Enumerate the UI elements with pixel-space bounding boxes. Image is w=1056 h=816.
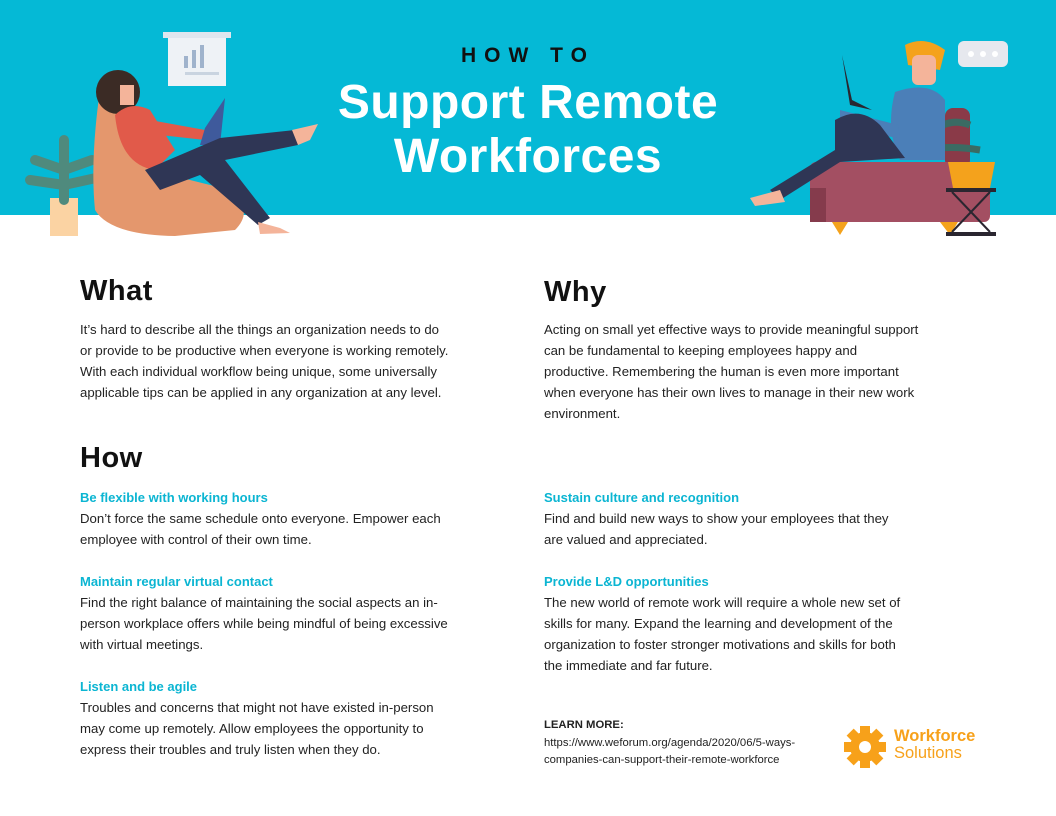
- tip: listen: [80, 679, 434, 757]
- heading: How: How: [80, 442, 143, 474]
- logo: Workforce: [894, 727, 975, 745]
- section: What: applicable tips can be applied in any organization at any level.: [80, 385, 441, 400]
- tip: culture: [544, 490, 889, 547]
- title: [338, 44, 718, 183]
- tip: L&D: the immediate and far future.: [544, 658, 713, 673]
- title: Support Remote: [338, 76, 718, 129]
- section: What: or provide to be productive when everyone is working remotely.: [80, 343, 448, 358]
- tip: culture: Find and build new ways to show your employees that they: [544, 511, 889, 526]
- learn more: LEARN MORE:: [544, 719, 624, 731]
- section: What: It’s hard to describe all the things an organization needs to do: [80, 322, 439, 337]
- tip: flexible hours: Don’t force the same schedule onto everyone. Empower each: [80, 511, 441, 526]
- learn more: https://www.weforum.org/agenda/2020/06/5-ways-: [544, 736, 795, 748]
- tip: flexible hours: [80, 490, 441, 547]
- illustration: woman on beanbag: [25, 32, 318, 236]
- logo: Solutions: [894, 744, 962, 762]
- learn more: companies-can-support-their-remote-workforce: [544, 754, 779, 766]
- tip: L&D: The new world of remote work will require a whole new set of: [544, 595, 900, 610]
- section: What: What: [80, 275, 153, 307]
- illustration: man on couch: [750, 41, 1008, 236]
- section: Why: environment.: [544, 406, 620, 421]
- tip: flexible hours: Be flexible with working hours: [80, 490, 268, 505]
- section: Why: [544, 276, 918, 421]
- tip: virtual contact: Find the right balance of maintaining the social aspects an in-: [80, 595, 438, 610]
- tip: listen: express their troubles and truly listen when they do.: [80, 742, 381, 757]
- tip: virtual contact: [80, 574, 448, 652]
- tip: L&D: organization to foster stronger motivations and skills for both: [544, 637, 896, 652]
- tip: virtual contact: Maintain regular virtual contact: [80, 574, 273, 589]
- tip: listen: may come up remotely. Allow employees the opportunity to: [80, 721, 424, 736]
- tip: culture: Sustain culture and recognition: [544, 490, 739, 505]
- tip: listen: Troubles and concerns that might not have existed in-person: [80, 700, 434, 715]
- title: Workforces: [394, 130, 662, 183]
- tip: L&D: Provide L&D opportunities: [544, 574, 709, 589]
- section: Why: Acting on small yet effective ways to provide meaningful support: [544, 322, 918, 337]
- section: Why: Why: [544, 276, 607, 308]
- section: Why: productive. Remembering the human is even more important: [544, 364, 899, 379]
- section: Why: can be fundamental to keeping employees happy and: [544, 343, 857, 358]
- tip: virtual contact: person workplace offers while being mindful of being excessive: [80, 616, 448, 631]
- tip: L&D: [544, 574, 900, 673]
- icon: gear: [844, 726, 886, 768]
- logo: [844, 726, 975, 768]
- tip: virtual contact: with virtual meetings.: [80, 637, 203, 652]
- banner: [0, 0, 1056, 215]
- learn more: [544, 719, 795, 766]
- section: What: With each individual workflow being unique, some universally: [80, 364, 437, 379]
- tip: culture: are valued and appreciated.: [544, 532, 708, 547]
- title: HOW TO: [461, 44, 595, 67]
- section: What: [80, 275, 448, 400]
- tip: listen: Listen and be agile: [80, 679, 197, 694]
- tip: flexible hours: employee with control of their own time.: [80, 532, 312, 547]
- tip: L&D: skills for many. Expand the learning and development of the: [544, 616, 893, 631]
- section: Why: when everyone has their own lives to manage in their new work: [544, 385, 914, 400]
